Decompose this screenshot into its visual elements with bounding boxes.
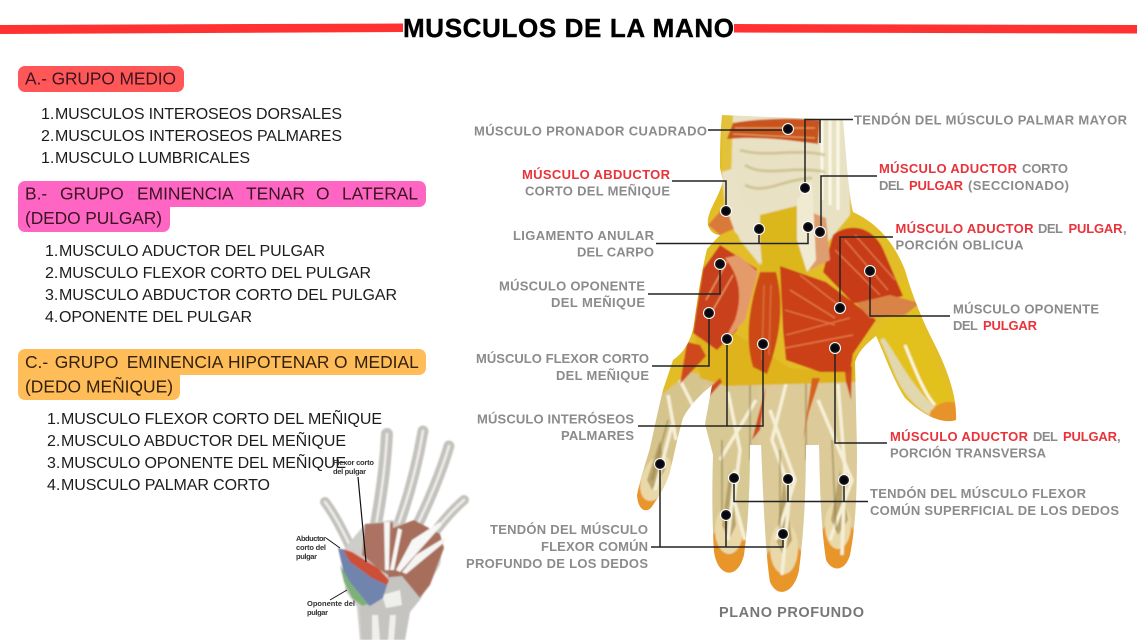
label: musculo oponente del pulgar: MÚSCULO OPONENTE	[953, 302, 1099, 316]
title with red rules: MUSCULOS DE LA MANO	[403, 13, 734, 43]
palm yellow ground	[695, 330, 865, 386]
heading: grupo medio	[18, 66, 184, 92]
hypothenar muscles	[693, 245, 757, 350]
label: musculo oponente del pulgar: DEL	[953, 318, 978, 333]
label: musculo aductor del pulgar porcion oblicua: PORCIÓN OBLICUA	[896, 238, 1024, 252]
pronator muscle	[727, 119, 820, 144]
label: flexor corto del pulgar: Flexor corto	[333, 458, 374, 467]
list: grupo eminencia hipotenar: MUSCULO ABDUCTOR DEL MEÑIQUE	[61, 430, 346, 450]
list: grupo eminencia hipotenar: MUSCULO OPONENTE DEL MEÑIQUE	[61, 452, 346, 472]
label: musculo aductor corto del pulgar: (SECCIONADO)	[968, 178, 1069, 193]
label: flexor corto del pulgar	[333, 458, 374, 476]
list: grupo eminencia hipotenar: 4.	[47, 477, 60, 494]
list: grupo eminencia tenar: MUSCULO FLEXOR CORTO DEL PULGAR	[59, 265, 371, 282]
list: grupo eminencia hipotenar: 2.	[47, 433, 60, 450]
label: musculo aductor del pulgar porcion transversa: DEL	[1033, 429, 1058, 444]
label: ligamento anular del carpo: DEL CARPO	[577, 244, 654, 260]
label: musculo aductor del pulgar porcion transversa: MÚSCULO ADUCTOR	[890, 429, 1029, 444]
label: flexor corto del pulgar: del pulgar	[333, 467, 366, 476]
label: oponente del pulgar: Oponente del	[307, 599, 355, 608]
label: ligamento anular del carpo: LIGAMENTO ANULAR	[513, 228, 655, 243]
heading: grupo eminencia hipotenar	[18, 349, 426, 400]
list: grupo eminencia hipotenar: 1.	[47, 411, 60, 428]
wrist	[725, 115, 850, 270]
list: grupo eminencia tenar: 3.	[45, 287, 58, 304]
heading: grupo eminencia tenar: B.-	[25, 184, 47, 204]
label: tendon del musculo flexor comun profundo	[466, 522, 648, 571]
label: musculo aductor del pulgar porcion oblicua: DEL	[1038, 221, 1063, 236]
label: oponente del pulgar	[307, 599, 355, 617]
label: tendon del musculo flexor comun profundo: PROFUNDO DE LOS DEDOS	[466, 556, 648, 571]
heading: grupo eminencia tenar	[18, 181, 426, 232]
list: grupo eminencia tenar: OPONENTE DEL PULGAR	[59, 309, 252, 326]
list: grupo medio	[41, 106, 342, 167]
label: tendon del musculo flexor comun superficial: TENDÓN DEL MÚSCULO FLEXOR	[870, 486, 1087, 501]
label: musculo interoseos palmares: MÚSCULO INTERÓSEOS	[477, 412, 634, 426]
label: musculo aductor del pulgar porcion transversa	[890, 429, 1121, 460]
label: musculo abductor corto del menique: MÚSCULO ABDUCTOR	[522, 167, 671, 182]
carpal ligaments	[722, 168, 762, 265]
label: abductor corto del pulgar: Abductor	[296, 534, 326, 543]
label: musculo aductor del pulgar porcion oblicua: PULGAR	[1068, 221, 1123, 236]
list: grupo medio: MUSCULOS INTEROSEOS DORSALES	[55, 106, 342, 123]
label: tendon del musculo flexor comun superficial	[870, 486, 1119, 518]
fingers	[640, 371, 721, 482]
panel: grupo eminencia tenar	[18, 181, 426, 326]
list: grupo eminencia tenar: MUSCULO ADUCTOR DEL PULGAR	[59, 243, 325, 260]
heading: grupo medio: A.- GRUPO MEDIO	[25, 68, 176, 88]
heading: grupo eminencia tenar: (DEDO PULGAR)	[25, 208, 162, 228]
panel: grupo eminencia hipotenar	[18, 349, 426, 494]
small hand drawing	[325, 431, 464, 640]
list: grupo medio: 1.	[41, 106, 54, 123]
heading: grupo eminencia hipotenar: MEDIAL	[354, 352, 419, 372]
list: grupo eminencia tenar: 1.	[45, 243, 58, 260]
label: musculo oponente del pulgar: PULGAR	[983, 318, 1038, 333]
label: oponente del pulgar: pulgar	[307, 608, 328, 617]
list: grupo eminencia tenar: 2.	[45, 265, 58, 282]
label: abductor corto del pulgar	[296, 534, 326, 561]
label: musculo interoseos palmares	[477, 412, 634, 443]
panel: grupo medio	[18, 66, 342, 167]
label: musculo flexor corto del menique	[476, 351, 649, 383]
title with red rules	[0, 13, 1137, 43]
list: grupo eminencia hipotenar	[47, 408, 382, 494]
label: musculo oponente del menique: MÚSCULO OPONENTE	[499, 278, 645, 294]
list: grupo eminencia hipotenar: MUSCULO PALMAR CORTO	[61, 477, 270, 494]
label: musculo oponente del menique: DEL MEÑIQUE	[551, 295, 645, 310]
label: musculo aductor corto del pulgar	[879, 161, 1069, 193]
label: musculo aductor del pulgar porcion oblicua: ,	[1123, 221, 1127, 236]
thenar muscles	[780, 266, 876, 372]
label: musculo aductor del pulgar porcion transversa: ,	[1117, 429, 1121, 444]
list: grupo eminencia tenar: MUSCULO ABDUCTOR CORTO DEL PULGAR	[59, 287, 397, 304]
list: grupo medio: MUSCULO LUMBRICALES	[55, 150, 250, 167]
label: musculo aductor corto del pulgar: CORTO	[1022, 161, 1068, 176]
label: musculo abductor corto del menique: CORTO DEL MEÑIQUE	[525, 184, 670, 198]
hand anatomy artwork	[625, 110, 970, 600]
label: musculo aductor corto del pulgar: PULGAR	[909, 178, 964, 193]
label: musculo interoseos palmares: PALMARES	[561, 428, 634, 443]
heading: grupo eminencia tenar: EMINENCIA	[137, 184, 234, 204]
label: musculo pronador cuadrado: MÚSCULO PRONADOR CUADRADO	[474, 124, 707, 138]
list: grupo eminencia tenar	[45, 243, 397, 326]
list: grupo medio: 1.	[41, 150, 54, 167]
olive shading in fingers	[647, 440, 848, 555]
heading: grupo eminencia tenar: LATERAL	[342, 184, 418, 204]
heading: grupo eminencia hipotenar: GRUPO	[55, 352, 118, 372]
label: abductor corto del pulgar: corto del	[296, 543, 326, 552]
heading: grupo eminencia hipotenar: C.-	[25, 352, 48, 372]
label: musculo aductor del pulgar porcion oblicua: MÚSCULO ADUCTOR	[896, 221, 1034, 236]
list: grupo medio: 2.	[41, 128, 54, 145]
large hand illustration	[625, 110, 970, 600]
heading: grupo eminencia hipotenar: HIPOTENAR	[228, 352, 329, 372]
heading: grupo eminencia hipotenar: EMINENCIA	[127, 352, 224, 372]
heading: grupo eminencia hipotenar: O	[334, 352, 348, 372]
list: grupo eminencia hipotenar: 3.	[47, 455, 60, 472]
label: musculo oponente del pulgar	[953, 302, 1099, 333]
heading: grupo eminencia tenar: O	[316, 184, 330, 204]
tendons	[655, 380, 852, 575]
label: musculo abductor corto del menique	[522, 167, 671, 198]
label: musculo flexor corto del menique: MÚSCULO FLEXOR CORTO	[476, 351, 649, 366]
label: tendon del musculo palmar mayor: TENDÓN DEL MÚSCULO PALMAR MAYOR	[854, 112, 1128, 128]
connector lines	[638, 120, 950, 547]
abductor of little finger	[708, 210, 734, 236]
label: plano profundo: PLANO PROFUNDO	[719, 605, 864, 621]
list: grupo medio: MUSCULOS INTEROSEOS PALMARES	[55, 128, 342, 145]
list: grupo eminencia tenar: 4.	[45, 309, 58, 326]
heading: grupo eminencia hipotenar: (DEDO MEÑIQUE)	[25, 376, 173, 396]
list: grupo eminencia hipotenar: MUSCULO FLEXOR CORTO DEL MEÑIQUE	[61, 408, 382, 428]
label: abductor corto del pulgar: pulgar	[296, 552, 317, 561]
label: musculo aductor del pulgar porcion transversa: PULGAR	[1063, 429, 1118, 444]
small red finger muscles	[680, 342, 706, 384]
label: tendon del musculo flexor comun profundo: FLEXOR COMÚN	[541, 539, 648, 554]
finger tips	[637, 482, 658, 510]
heading: grupo eminencia tenar: GRUPO	[60, 184, 124, 204]
heading: grupo eminencia tenar: TENAR	[246, 184, 305, 204]
label: tendon del musculo flexor comun superficial: COMÚN SUPERFICIAL DE LOS DEDOS	[870, 503, 1119, 518]
label: musculo aductor corto del pulgar: DEL	[879, 178, 904, 193]
label: ligamento anular del carpo	[513, 228, 655, 260]
label: musculo aductor del pulgar porcion transversa: PORCIÓN TRANSVERSA	[890, 446, 1047, 460]
label: musculo aductor corto del pulgar: MÚSCULO ADUCTOR	[879, 161, 1018, 176]
label: musculo oponente del menique	[499, 278, 645, 310]
thumb	[877, 282, 952, 404]
label: musculo flexor corto del menique: DEL MEÑIQUE	[556, 368, 649, 383]
small hand illustration	[296, 431, 464, 640]
label: tendon del musculo flexor comun profundo: TENDÓN DEL MÚSCULO	[490, 522, 648, 537]
label: musculo aductor del pulgar porcion oblicua	[896, 221, 1127, 252]
marker dots	[654, 123, 876, 540]
